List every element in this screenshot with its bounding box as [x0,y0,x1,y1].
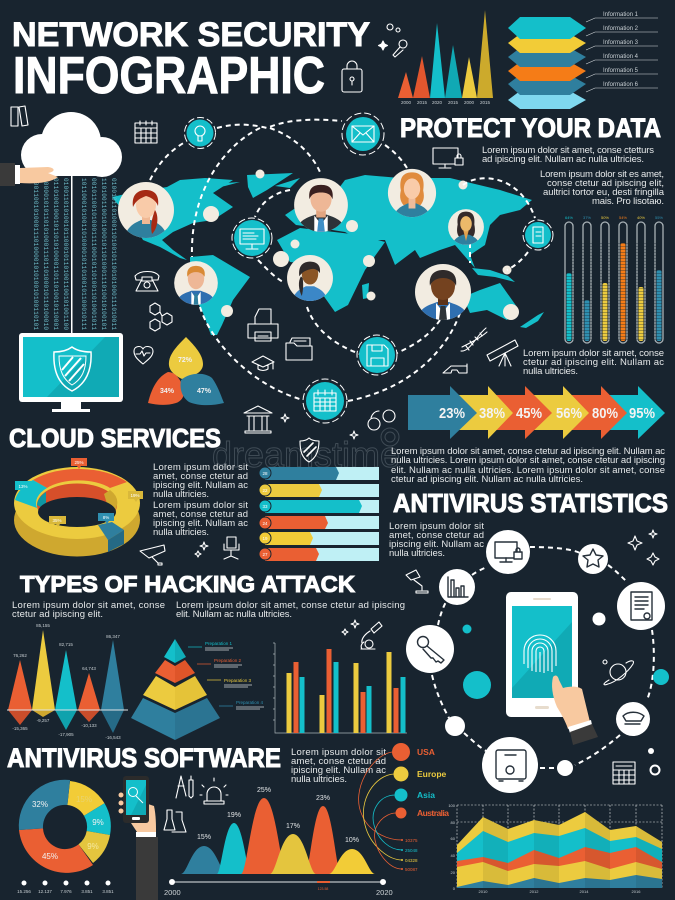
3D donut chart: 8% [103,515,109,520]
binary data stream: 0100110101001011000101101001100101001100 [62,178,69,330]
donut chart: 7.976 [60,889,72,894]
triangle chart: 2000 [401,100,412,105]
diamond value chart [7,623,128,740]
diamond value chart: -17,905 [58,732,74,737]
icon: telescope [487,340,518,366]
binary data stream: 1101001100101000101101000111010010100101 [100,178,107,330]
bell curve chart [181,787,375,874]
stacked area chart: 80 [451,820,456,825]
text block: protect intro: ad ipiscing elit. Nullam ac nulla ultricies. [482,154,644,165]
smartphone with fingerprint [506,592,578,717]
icon: DNA helix [461,328,487,351]
text block: long paragraph [391,446,665,485]
text block: antivirus statistics: amet, conse ctetur ad [389,530,484,541]
region legend: 50087 [405,867,418,872]
text block: cloud services 1 [153,462,248,500]
3D donut chart: 13% [18,484,28,489]
stacked area chart: 20 [451,870,456,875]
3D donut chart: 25% [74,460,84,465]
triangle chart: 2020 [432,100,443,105]
percentage arrows: 80% [592,405,618,422]
diamond value chart: -10,133 [81,723,97,728]
tube gauge chart: 54% [619,215,627,220]
region legend [359,743,449,872]
stacked area chart [448,803,662,894]
binary data stream [32,178,117,330]
icon: calendar [135,121,157,143]
horizontal progress bars: 19 [262,536,268,541]
stacked area chart: 2012 [530,889,539,894]
diamond value chart: 64,743 [82,666,96,671]
text block: protect intro [482,145,654,165]
connection line [71,176,72,334]
person: blond woman [388,169,436,217]
text block: long paragraph: elit. Nullam ac nulla ultricies. Lorem ipsum dolor sit amet, conse [391,465,665,476]
text block: antivirus statistics: ipiscing elit. Nullam ac [389,539,484,550]
binary data stream: 0010110010100011110001011010011010001011 [90,178,97,330]
icon: heart [134,347,153,364]
icon: desk lamp [406,570,428,593]
bell curve chart: 17% [286,823,300,830]
badge: police cap [616,702,650,736]
person: man in suit [294,178,348,232]
icon: glasses [443,364,467,373]
region legend: 04328 [405,858,418,863]
person: dark haired woman [448,209,484,245]
information labels: Information 1 [603,12,639,18]
title: INFOGRAPHIC [13,47,325,105]
text block: cloud services 2: nulla ultricies. [153,527,209,538]
icon badge: floppy disk [357,335,397,375]
text block: hacking right: elit. Nullam ac nulla ultricies. [176,609,292,620]
region legend: USA [417,747,435,757]
text block: right aligned: aultrici tortor eu, desti fringilla [543,187,665,198]
icon: cloud [21,112,122,177]
text block: hacking right [176,600,405,620]
timeline [164,879,393,897]
bell curve chart: 15% [197,834,211,841]
badge: certificate [617,582,665,630]
pointing hand [552,676,598,745]
text block: hacking left: ctetur ad ipiscing elit. [12,609,103,620]
horizontal progress bars: 27 [262,552,268,557]
region legend: 25048 [405,848,418,853]
text block: right aligned: conse ctetur ad ipiscing elit, [547,178,664,189]
icon: sparkle small [350,431,358,439]
text block: protect intro: Lorem ipsum dolor sit amet, conse ctetturs [482,145,654,156]
icon: fingerprint [524,635,556,673]
icon: open folder [286,338,312,360]
text block: cloud services 2: ipiscing elit. Nullam ac [153,518,248,529]
pyramid chart: Preparation 4 [236,700,264,705]
map location dots [203,170,519,320]
person: young man [174,261,218,305]
text block: under tubes: ctetur ad ipiscing elit. Nullam ac [523,357,664,368]
diamond value chart: 82,715 [59,642,73,647]
text block: long paragraph: nulla ultricies. Lorem ipsum dolor sit amet, conse ctetur ad ipiscing [391,455,665,466]
3D donut chart: 19% [130,493,140,498]
text block: long paragraph: Lorem ipsum dolor sit amet, conse ctetur ad ipiscing elit. Nullam ac [391,446,665,457]
badge: key [406,625,454,673]
percentage arrows [408,386,665,439]
text block: antivirus software [291,747,386,785]
binary data stream: 0100101101000110100101100101000111010011 [110,178,117,330]
icon: bank [244,406,272,433]
heading: antivirus software: ANTIVIRUS SOFTWARE [7,743,281,773]
icon badge: lightbulb [184,118,216,148]
donut chart [17,780,114,894]
icon: sparkle [281,414,289,422]
badge: safe [482,737,538,793]
timeline: 2000 [164,888,181,897]
percentage arrows: 56% [556,405,582,422]
hand holding phone [118,776,158,900]
information labels: Information 4 [603,54,639,60]
pyramid chart: Preparation 1 [205,641,233,646]
dashed network routes [150,120,535,401]
information labels: Information 2 [603,26,639,32]
icon: security camera [140,545,165,565]
heading: types of hacking attack: TYPES OF HACKING ATTACK [20,571,355,597]
region legend: Asia [417,790,435,800]
donut chart: 32% [32,800,48,809]
person: man with dark skin [415,264,471,320]
diamond value chart: -9,257 [37,718,50,723]
icon badge: envelope [342,113,384,155]
donut chart: 15% [76,795,92,804]
icon: stars [628,530,659,565]
donut chart: 3.851 [102,889,114,894]
binary data stream: 1000010101101010001110110100010110100010 [42,178,49,330]
icon: shield [300,438,319,462]
text block: antivirus software: nulla ultricies. [291,774,347,785]
donut chart: 9% [87,842,99,851]
tube gauge chart [565,215,663,343]
text block: right aligned: mais. Pro lisotaю. [592,196,664,207]
hand holding cloud [0,163,58,186]
region legend: Australia [417,808,449,818]
badge: monitor and lock [486,530,530,574]
tube gauge chart: 37% [583,215,591,220]
tube gauge chart: 55% [655,215,663,220]
percentage arrows: 38% [479,405,505,422]
text block: cloud services 1: Lorem ipsum dolor sit [153,462,248,473]
percentage arrows: 95% [629,405,655,422]
badge: bar chart [439,569,475,605]
donut chart: 15.256 [17,889,31,894]
icon: compass and pencil [176,776,193,798]
icon: siren [200,778,228,804]
pyramid chart [131,639,264,740]
dots around phone [445,612,669,776]
text block: under tubes: Lorem ipsum dolor sit amet, conse [523,348,664,359]
horizontal progress bars: 22 [262,488,268,493]
stacked area chart: 60 [451,836,456,841]
triangle chart [398,10,493,105]
monitor with shield [19,333,123,412]
percentage arrows: 45% [516,405,542,422]
icon: calculator [613,762,635,784]
text block: right aligned [540,169,665,207]
diamond value chart: -16,543 [105,735,121,740]
layered hexagon stack [508,17,586,109]
bell curve chart: 25% [257,787,271,794]
text block: cloud services 1: nulla ultricies. [153,489,209,500]
grouped bar chart [273,643,407,733]
text block: antivirus statistics: Lorem ipsum dolor sit [389,521,484,532]
text block: under tubes: nulla ultricies. [523,366,578,377]
triangle chart: 2000 [464,100,475,105]
petal chart [148,337,224,405]
icon badge: monitor [232,218,272,258]
stacked area chart: 2010 [479,889,488,894]
icon: molecule [150,303,172,331]
icon: flasks [164,810,186,832]
donut chart: 12.137 [38,889,52,894]
information labels [586,12,658,92]
binary data stream: 0110100100010110101000011011010010110001 [52,178,59,330]
text block: long paragraph: ctetur ad ipiscing elit. Nullam ac nulla ultricies. [391,474,583,485]
title: NETWORK SECURITY [12,16,370,54]
pyramid chart: Preparation 3 [224,678,252,683]
stacked area chart: 2016 [632,889,641,894]
horizontal progress bars: 28 [262,471,268,476]
icon badge: document [523,220,553,250]
donut chart: 3.851 [81,889,93,894]
horizontal progress bars [259,467,379,561]
watermark: dreamstime [212,434,400,475]
world map [112,173,544,335]
bell curve chart: 23% [316,795,330,802]
text block: hacking right: Lorem ipsum dolor sit amet, conse ctetur ad ipiscing [176,600,405,611]
icon: printer [248,309,278,341]
triangle chart: 2015 [417,100,428,105]
information labels: Information 3 [603,40,639,46]
bell curve chart: 10% [345,837,359,844]
icon: handcuffs [368,410,395,430]
title [12,16,370,105]
icon: planet [603,660,634,685]
text block: antivirus software: amet, conse ctetur ad [291,756,386,767]
pyramid chart: Preparation 2 [214,658,242,663]
text block: antivirus software: ipiscing elit. Nullam ac [291,765,386,776]
region legend: Europe [417,769,447,779]
timeline: 2020 [376,888,393,897]
stacked area chart: 40 [451,853,456,858]
binary data stream: 0001100101000111010000101010010100110101 [32,178,39,330]
horizontal progress bars: 24 [262,521,268,526]
3D donut chart [14,458,143,556]
icon badge: calendar [303,379,347,423]
dashed ring around phone [432,547,654,768]
timeline: 123.58 [318,887,328,891]
icon: microscope and stars [342,620,382,649]
region legend: 10375 [405,838,418,843]
donut chart: 9% [92,818,104,827]
diamond value chart: 85,155 [36,623,50,628]
text block: cloud services 2: amet, conse ctetur ad [153,509,248,520]
text block: hacking left [12,600,165,620]
person: woman with dark skin [287,255,333,301]
percentage arrows: 23% [439,405,465,422]
stacked area chart: 100 [448,803,456,808]
triangle chart: 2015 [448,100,459,105]
icon: rotary telephone [135,272,159,291]
tube gauge chart: 40% [637,215,645,220]
icon: padlock [342,61,362,92]
text block: under tubes [523,348,664,377]
diamond value chart: 76,262 [13,653,27,658]
icon: monitor with lock [433,148,463,168]
text block: antivirus software: Lorem ipsum dolor sit [291,747,386,758]
icon: magnifier and sparkles [378,24,407,57]
text block: cloud services 1: ipiscing elit. Nullam ac [153,480,248,491]
information labels: Information 6 [603,82,639,88]
stacked area chart: 2014 [580,889,589,894]
heading: cloud services: CLOUD SERVICES [9,425,221,453]
text block: hacking left: Lorem ipsum dolor sit amet, conse [12,600,165,611]
icon: graduation cap [252,356,274,370]
petal chart: 34% [160,388,175,395]
icon: office chair [224,537,239,559]
petal chart: 72% [178,357,193,364]
triangle chart: 2015 [480,100,491,105]
bell curve chart: 19% [227,812,241,819]
diamond value chart: 86,347 [106,634,120,639]
stacked area chart: 0 [453,886,456,891]
horizontal progress bars: 33 [262,504,268,509]
tube gauge chart: 64% [565,215,573,220]
diamond value chart: -15,365 [12,726,28,731]
icon: sparkles [195,542,208,557]
information labels: Information 5 [603,68,639,74]
text block: cloud services 2 [153,500,248,538]
person: woman with red hair [118,182,174,238]
petal chart: 47% [197,388,212,395]
binary data stream: 1011000101001101000010110100101100010111 [80,178,87,330]
donut chart: 45% [42,852,58,861]
text block: antivirus statistics: nulla ultricies. [389,548,445,559]
text block: cloud services 2: Lorem ipsum dolor sit [153,500,248,511]
badge: sheriff star [578,544,608,574]
text block: right aligned: Lorem ipsum dolor sit es amet, [540,169,664,180]
text block: antivirus statistics [389,521,484,559]
icon: folders [11,106,28,126]
text block: cloud services 1: amet, conse ctetur ad [153,471,248,482]
3D donut chart: 35% [52,518,62,523]
tube gauge chart: 50% [601,215,609,220]
